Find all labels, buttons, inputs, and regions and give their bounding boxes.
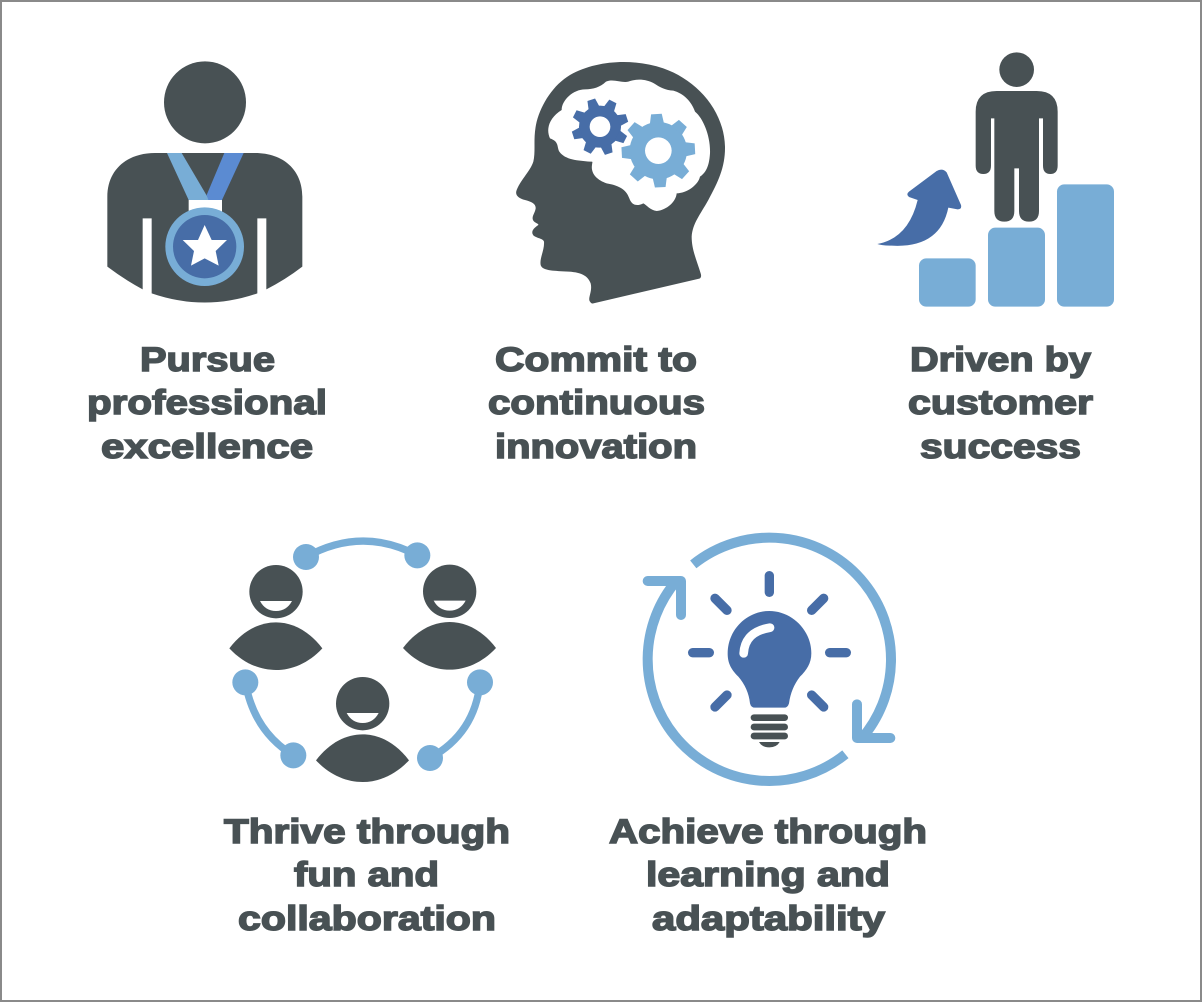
label: pursue professional excellence: professional: [87, 384, 327, 422]
icon: person with medal: [107, 61, 302, 302]
label: thrive through fun and collaboration: [224, 813, 510, 938]
label: achieve through learning and adaptability: adaptability: [652, 900, 885, 938]
panel: achieve through learning and adaptability: [598, 488, 940, 938]
label: pursue professional excellence: excellence: [101, 428, 313, 466]
label: pursue professional excellence: [87, 341, 327, 466]
label: commit to continuous innovation: innovation: [495, 428, 697, 466]
panel: thrive through fun and collaboration: [224, 541, 510, 938]
label: driven by customer success: [908, 341, 1093, 466]
label: commit to continuous innovation: [488, 341, 705, 466]
label: thrive through fun and collaboration: collaboration: [238, 900, 496, 938]
label: driven by customer success: customer: [908, 384, 1093, 422]
panel: pursue professional excellence: [87, 61, 327, 466]
icon: three people connected in a circle: [229, 541, 496, 782]
label: achieve through learning and adaptability: Achieve through: [609, 813, 927, 851]
label: thrive through fun and collaboration: fun and: [294, 856, 439, 894]
label: commit to continuous innovation: Commit to: [495, 341, 697, 379]
panel: commit to continuous innovation: [488, 62, 725, 466]
label: achieve through learning and adaptability: [609, 813, 927, 938]
label: driven by customer success: Driven by: [910, 341, 1091, 379]
icon: head with gears: [516, 62, 725, 303]
label: thrive through fun and collaboration: Thrive through: [224, 813, 510, 851]
icon: person on rising bars with arrow: [877, 52, 1114, 307]
panel: driven by customer success: [877, 52, 1114, 466]
label: pursue professional excellence: Pursue: [140, 341, 275, 379]
label: commit to continuous innovation: continuous: [488, 384, 705, 422]
icon: light bulb in circular arrows: [598, 488, 940, 830]
gear: small dark: [571, 98, 629, 155]
label: driven by customer success: success: [920, 428, 1081, 466]
label: achieve through learning and adaptability: learning and: [646, 856, 890, 894]
gear: large light: [621, 114, 695, 188]
